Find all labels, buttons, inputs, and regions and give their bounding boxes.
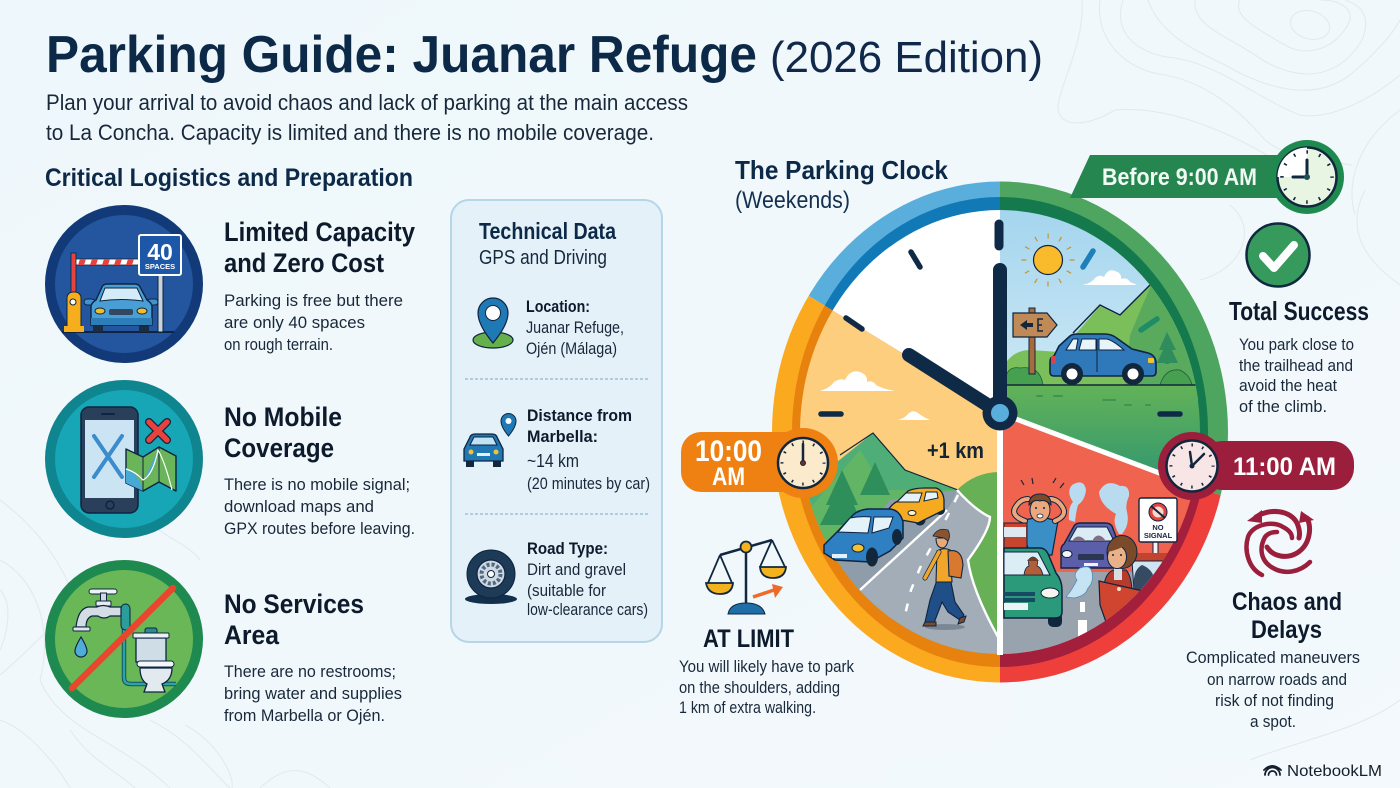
badge: 11 am — [1158, 432, 1354, 500]
icon: scales — [706, 540, 786, 614]
text: at limit: on the shoulders, adding — [679, 679, 840, 697]
text: distance — [527, 406, 650, 493]
icon: direction sign — [1013, 308, 1057, 374]
icon: no signal sign: SIGNAL — [1144, 531, 1173, 540]
icon: phone and map — [45, 380, 203, 538]
text: are only 40 spaces — [224, 313, 365, 332]
icon: car with pin — [464, 414, 516, 467]
icon: exhaust cloud — [1066, 567, 1092, 598]
heading — [224, 589, 364, 650]
icon: woman and open door — [1098, 535, 1168, 621]
heading — [224, 217, 415, 278]
heading: technical data: Technical Data — [479, 218, 616, 244]
icon: 11 am clock — [1166, 440, 1218, 492]
icon: no signal sign: NO — [1152, 523, 1164, 532]
icon: faucet and toilet crossed out — [45, 560, 203, 718]
icon: red car rear left — [1004, 523, 1027, 548]
icon: tyre — [465, 550, 517, 604]
icon: barrier, car and 40 spaces sign: 40 — [147, 239, 173, 265]
text: total success: of the climb. — [1239, 398, 1327, 416]
segment: 11 am scene — [1003, 422, 1190, 654]
icon: check mark — [1246, 224, 1310, 286]
icon: location pin — [473, 298, 513, 348]
text: from Marbella or Ojén. — [224, 706, 385, 725]
text: distance: (20 minutes by car) — [527, 475, 650, 493]
text: location — [526, 298, 624, 358]
text: total success: the trailhead and — [1239, 357, 1353, 375]
divider lines — [1000, 413, 1162, 655]
icon: green car — [1004, 548, 1062, 627]
heading: Coverage — [224, 433, 334, 463]
text: road type: Road Type: — [527, 539, 608, 558]
text — [224, 475, 415, 538]
icon: barrier, car and 40 spaces sign — [45, 205, 203, 363]
title: (2026 Edition) — [770, 33, 1043, 82]
icon: blue car — [1050, 334, 1156, 385]
heading: and Zero Cost — [224, 248, 384, 278]
segment: 10 am scene — [800, 310, 997, 654]
chart: parking clock — [772, 182, 1228, 682]
heading: total success: Total Success — [1229, 296, 1369, 326]
logo: NotebookLM: NotebookLM — [1287, 763, 1382, 780]
subtitle: to La Concha. Capacity is limited and there is no mobile coverage. — [46, 120, 654, 145]
text: on rough terrain. — [224, 335, 333, 354]
panel: limited capacity — [45, 205, 415, 363]
text: chaos and delays: Complicated maneuvers — [1186, 649, 1360, 667]
heading: the parking clock: (Weekends) — [735, 187, 850, 214]
heading: the parking clock: The Parking Clock — [735, 155, 949, 185]
segment: before 9 scene — [1000, 210, 1200, 470]
icon: 9 am clock — [1278, 148, 1336, 206]
text: chaos and delays: on narrow roads and — [1207, 671, 1347, 689]
text: location: Location: — [526, 298, 590, 316]
text: distance: Distance from — [527, 406, 632, 425]
icon: 10 am clock — [778, 438, 828, 488]
panel: technical data — [451, 200, 662, 642]
heading: chaos and delays: Delays — [1251, 616, 1322, 644]
text: download maps and — [224, 497, 374, 516]
text: 10 am: AM — [712, 463, 745, 491]
heading: the parking clock — [735, 155, 949, 214]
text: 10 am: 10:00 — [695, 435, 762, 468]
subtitle — [46, 90, 688, 145]
icon: barrier, car and 40 spaces sign: SPACES — [145, 262, 175, 271]
text: plus 1 km: +1 km — [927, 438, 984, 463]
text: chaos and delays: a spot. — [1250, 713, 1296, 731]
text: location: Juanar Refuge, — [526, 319, 624, 337]
heading: critical logistics: Critical Logistics and Preparation — [45, 164, 413, 192]
text: total success: avoid the heat — [1239, 377, 1337, 395]
text: Parking is free but there — [224, 291, 403, 310]
badge: before 9 am — [1070, 140, 1344, 214]
icon: hiker — [923, 529, 966, 630]
icon: chaos spiral — [1247, 510, 1314, 575]
icon: cloud — [1082, 270, 1137, 285]
text: road type: Dirt and gravel — [527, 561, 626, 579]
text — [224, 662, 402, 725]
icon: clouds — [820, 371, 930, 420]
text: 10 am — [695, 435, 762, 491]
text: at limit: 1 km of extra walking. — [679, 699, 816, 717]
subtitle: Plan your arrival to avoid chaos and lack of parking at the main access — [46, 90, 688, 115]
heading: chaos and delays: Chaos and — [1232, 588, 1342, 616]
icon: smoke — [1069, 482, 1129, 534]
text: distance: ~14 km — [527, 451, 579, 471]
icon: no signal sign — [1139, 498, 1177, 554]
text: 11 am: 11:00 AM — [1233, 453, 1336, 481]
badge: 10 am — [681, 428, 838, 498]
heading: chaos and delays — [1232, 588, 1342, 644]
text: bring water and supplies — [224, 684, 402, 703]
text: distance: Marbella: — [527, 427, 598, 446]
heading: technical data — [479, 218, 616, 269]
text: location: Ojén (Málaga) — [526, 340, 617, 358]
text: at limit — [679, 658, 855, 717]
heading: at limit: AT LIMIT — [703, 625, 794, 653]
text: There are no restrooms; — [224, 662, 396, 681]
clock hub — [982, 396, 1018, 430]
heading: technical data: GPS and Driving — [479, 247, 607, 269]
text: road type: low-clearance cars) — [527, 601, 648, 619]
text: total success: You park close to — [1239, 336, 1354, 354]
heading: No Mobile — [224, 402, 342, 432]
clock hands — [909, 270, 1000, 413]
text: road type — [527, 539, 648, 619]
panel: no mobile coverage — [45, 380, 415, 538]
icon: sun — [1023, 235, 1073, 285]
text — [224, 291, 403, 354]
text: GPX routes before leaving. — [224, 519, 415, 538]
icon: stressed man — [1014, 478, 1064, 555]
icon: purple car — [1061, 523, 1118, 568]
heading: No Services — [224, 589, 364, 619]
text: road type: (suitable for — [527, 582, 606, 600]
segment: empty white — [832, 210, 1000, 398]
title: Parking Guide: Juanar Refuge — [46, 26, 757, 84]
text: chaos and delays: risk of not finding — [1215, 692, 1334, 710]
icon: blue car on shoulder — [824, 509, 903, 566]
text: chaos and delays — [1186, 649, 1360, 731]
clock rings — [772, 182, 1228, 682]
icon: yellow car — [888, 488, 945, 526]
text: before 9: Before 9:00 AM — [1102, 164, 1257, 191]
text: There is no mobile signal; — [224, 475, 410, 494]
heading — [224, 402, 342, 463]
panel: no services — [45, 560, 402, 725]
text: at limit: You will likely have to park — [679, 658, 855, 676]
heading: Area — [224, 620, 280, 650]
heading: Limited Capacity — [224, 217, 415, 247]
clock ticks — [821, 224, 1180, 414]
text: total success — [1239, 336, 1354, 416]
